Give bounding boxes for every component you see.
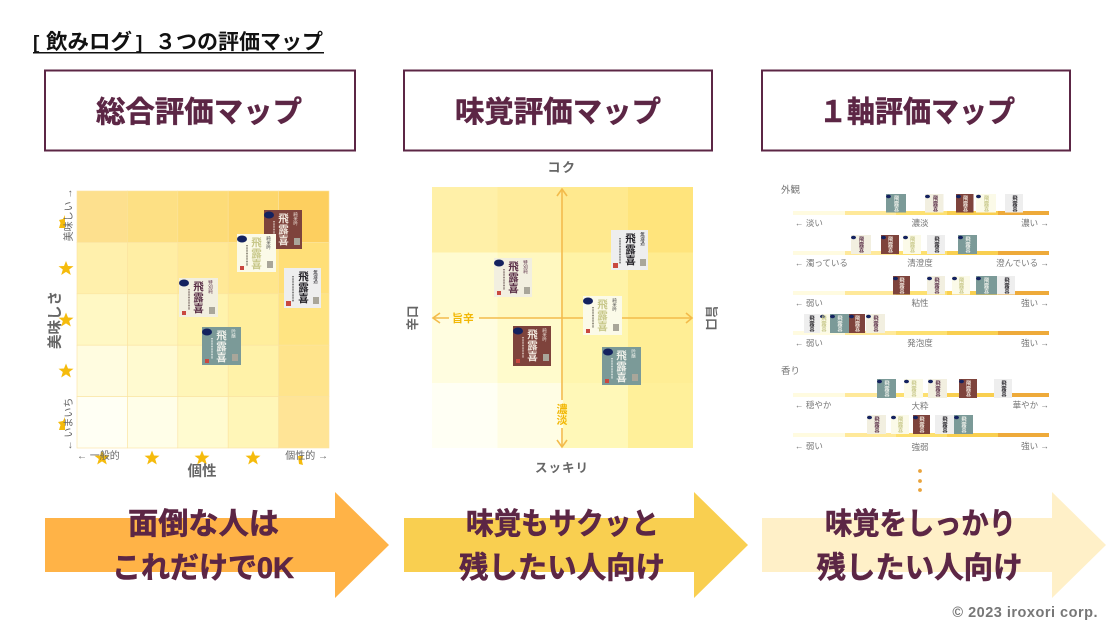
vertical star rating xyxy=(58,215,74,430)
axis inner labels: 旨辛 xyxy=(452,311,474,325)
axis labels: ← いまいち xyxy=(63,398,75,450)
arrow: 味覚もサクッと残したい人向け: 残したい人向け xyxy=(459,552,665,585)
sake labels row: 粘性: 飛露喜 xyxy=(958,276,964,295)
axis labels: 個性 xyxy=(188,463,216,480)
sake labels row: 強弱: 飛露喜 xyxy=(873,415,880,434)
sake labels row: 粘性: 飛露喜 xyxy=(982,276,989,295)
sake labels row: 強弱: 飛露喜 xyxy=(941,415,948,434)
arrow: 味覚もサクッと残したい人向け xyxy=(404,492,748,598)
axis outer labels: スッキリ xyxy=(535,461,589,475)
copyright: © 2023 iroxori corp. xyxy=(952,605,1098,621)
panel: taste evaluation map: 吟醸 xyxy=(631,348,636,359)
sake labels: 純米吟 xyxy=(293,211,298,227)
scale labels: 大粋 xyxy=(911,401,929,411)
sake labels row: 粘性: 飛露喜 xyxy=(1003,276,1010,295)
scale labels: 強い → xyxy=(1021,298,1049,308)
sake labels row: 清澄度: 飛露喜 xyxy=(908,235,915,254)
sake labels row: 清澄度: 飛露喜 xyxy=(886,235,893,254)
heading box: 総合評価マップ xyxy=(45,70,355,150)
scale labels: ← 弱い xyxy=(795,298,823,308)
sake labels row: 清澄度: 飛露喜 xyxy=(858,235,864,254)
sake labels xyxy=(264,210,302,249)
arrow: 面倒な人はこれだけで0K xyxy=(45,492,389,598)
axis labels: 美味しさ xyxy=(46,291,64,349)
panel: overall evaluation map: 飛露喜 xyxy=(192,280,204,314)
sake labels row: 濃淡: 飛露喜 xyxy=(892,194,899,213)
scale labels: ← 弱い xyxy=(795,338,823,348)
sake labels row: 濃淡: 飛露喜 xyxy=(932,194,938,213)
scale labels: 清澄度 xyxy=(907,258,933,268)
axis outer labels xyxy=(405,160,718,475)
panel: overall evaluation map: 飛露喜 xyxy=(250,236,262,270)
sake labels row: 濃淡 xyxy=(886,194,1023,213)
title: ３つの評価マップ xyxy=(155,31,323,54)
sake labels row: 粘性 xyxy=(893,276,1015,295)
scale labels: ← 淡い xyxy=(795,218,823,228)
heatmap grid xyxy=(432,187,693,448)
sake labels row: 発泡度 xyxy=(804,314,885,333)
arrow: 味覚をしっかり残したい人向け xyxy=(762,492,1106,598)
sake labels row: 強弱 xyxy=(867,415,973,434)
sake labels row: 強弱: 飛露喜 xyxy=(960,415,967,434)
sake labels row: 濃淡: 飛露喜 xyxy=(982,194,989,213)
panel: overall evaluation map: 純米吟 xyxy=(266,235,272,251)
sake labels row: 発泡度: 飛露喜 xyxy=(836,314,843,333)
sake labels xyxy=(611,230,648,270)
panel: overall evaluation map: 飛露喜 xyxy=(297,270,309,304)
scale labels: 強弱 xyxy=(911,442,929,452)
scale labels: 粘性 xyxy=(911,298,929,308)
heading box: 味覚評価マップ xyxy=(404,70,712,150)
sake labels row: 粘性: 飛露喜 xyxy=(898,276,905,295)
sake labels: 飛露喜 xyxy=(624,232,636,266)
section label: 外観: 外観 xyxy=(781,184,800,196)
panel: single axis evaluation map xyxy=(781,184,1049,492)
heading box: 味覚評価マップ: 味覚評価マップ xyxy=(455,96,661,129)
panel: taste evaluation map: 飛露喜 xyxy=(615,349,627,383)
title: ] xyxy=(136,33,142,54)
title: 飲みログ xyxy=(46,30,132,54)
sake labels row: 強弱: 飛露喜 xyxy=(896,415,903,434)
panel: taste evaluation map: 飛露喜 xyxy=(596,298,608,332)
sake labels row: 大粋: 飛露喜 xyxy=(964,379,971,398)
arrow: 味覚もサクッと残したい人向け: 味覚もサクッと xyxy=(466,508,659,541)
arrow: 味覚をしっかり残したい人向け: 味覚をしっかり xyxy=(825,508,1016,541)
scale labels: 澄んでいる → xyxy=(996,258,1049,268)
arrow: 面倒な人はこれだけで0K: これだけで0K xyxy=(112,552,294,585)
continuation dots xyxy=(918,469,922,492)
axis inner labels xyxy=(452,311,568,427)
heading box: 総合評価マップ: 総合評価マップ xyxy=(96,96,302,129)
sake labels row: 清澄度: 飛露喜 xyxy=(933,235,940,254)
sake labels row: 発泡度: 飛露喜 xyxy=(854,314,860,333)
axis labels: 個性的 → xyxy=(285,449,328,462)
sake labels row: 大粋: 飛露喜 xyxy=(1000,379,1007,398)
title: [ xyxy=(33,33,40,54)
scale labels: 濃い → xyxy=(1021,218,1049,228)
scale labels: 強い → xyxy=(1021,441,1049,451)
heading box: 1軸評価マップ: １軸評価マップ xyxy=(819,96,1015,129)
arrow: 味覚をしっかり残したい人向け: 残したい人向け xyxy=(816,552,1022,585)
arrow: 面倒な人はこれだけで0K: 面倒な人は xyxy=(128,508,279,541)
sake labels row: 強弱: 飛露喜 xyxy=(918,415,925,434)
scale bars xyxy=(793,211,1049,437)
panel: taste evaluation map: 特別純 xyxy=(523,259,528,275)
panel: overall evaluation map: 特別純 xyxy=(208,279,214,295)
sake labels row: 濃淡: 飛露喜 xyxy=(1011,194,1018,213)
scale labels: ← 濁っている xyxy=(795,258,848,268)
horizontal star rating xyxy=(94,450,303,465)
sake labels row: 大粋: 飛露喜 xyxy=(910,379,917,398)
panel: taste evaluation map: 飛露喜 xyxy=(526,328,538,362)
sake labels: 無濾過 xyxy=(640,231,646,247)
title xyxy=(33,30,324,54)
heatmap grid xyxy=(77,191,329,448)
scale labels: 発泡度 xyxy=(907,338,933,348)
scale labels: ← 弱い xyxy=(795,441,823,451)
axis outer labels: 辛口 xyxy=(405,305,420,331)
axis inner labels: 淡 xyxy=(556,414,568,427)
panel: taste evaluation map: 純米吟 xyxy=(612,297,618,313)
axis outer labels: コク xyxy=(547,160,577,175)
sake labels row: 発泡度: 飛露喜 xyxy=(808,314,815,333)
axis arrows xyxy=(433,189,692,447)
panel: taste evaluation map: 純米吟 xyxy=(542,327,548,343)
sake labels row: 濃淡: 飛露喜 xyxy=(962,194,968,213)
sake labels row: 発泡度: 飛露喜 xyxy=(872,314,879,333)
axis outer labels: 旨口 xyxy=(704,305,718,331)
sake labels row: 清澄度: 飛露喜 xyxy=(964,235,971,254)
axis labels: 美味しい → xyxy=(62,189,75,241)
sake labels row: 大粋: 飛露喜 xyxy=(883,379,890,398)
heading box: 1軸評価マップ xyxy=(762,70,1070,150)
panel: overall evaluation map: 飛露喜 xyxy=(215,329,227,363)
panel: overall evaluation map: 吟醸 xyxy=(231,328,236,339)
sake labels row: 発泡度: 飛露喜 xyxy=(820,314,827,333)
scale labels: 強い → xyxy=(1021,338,1049,348)
axis labels xyxy=(46,189,328,480)
section label: 香り: 香り xyxy=(781,366,800,377)
panel: overall evaluation map: 無濾過 xyxy=(313,269,318,285)
scale labels: ← 穏やか xyxy=(795,400,832,410)
sake labels row: 粘性: 飛露喜 xyxy=(933,276,940,295)
sake labels row: 大粋 xyxy=(877,379,1012,398)
scale labels: 濃淡 xyxy=(911,218,929,228)
axis labels: ← 一般的 xyxy=(77,449,120,462)
axis inner labels: 濃 xyxy=(556,402,568,416)
scale labels xyxy=(795,218,1049,452)
panel: overall evaluation map xyxy=(46,189,329,480)
sake labels row: 大粋: 飛露喜 xyxy=(934,379,941,398)
panel: taste evaluation map: 飛露喜 xyxy=(507,260,519,294)
sake labels row: 清澄度 xyxy=(851,235,977,254)
sake labels: 飛露喜 xyxy=(277,212,289,246)
scale labels: 華やか → xyxy=(1013,400,1049,410)
panel: taste evaluation map xyxy=(405,160,718,475)
